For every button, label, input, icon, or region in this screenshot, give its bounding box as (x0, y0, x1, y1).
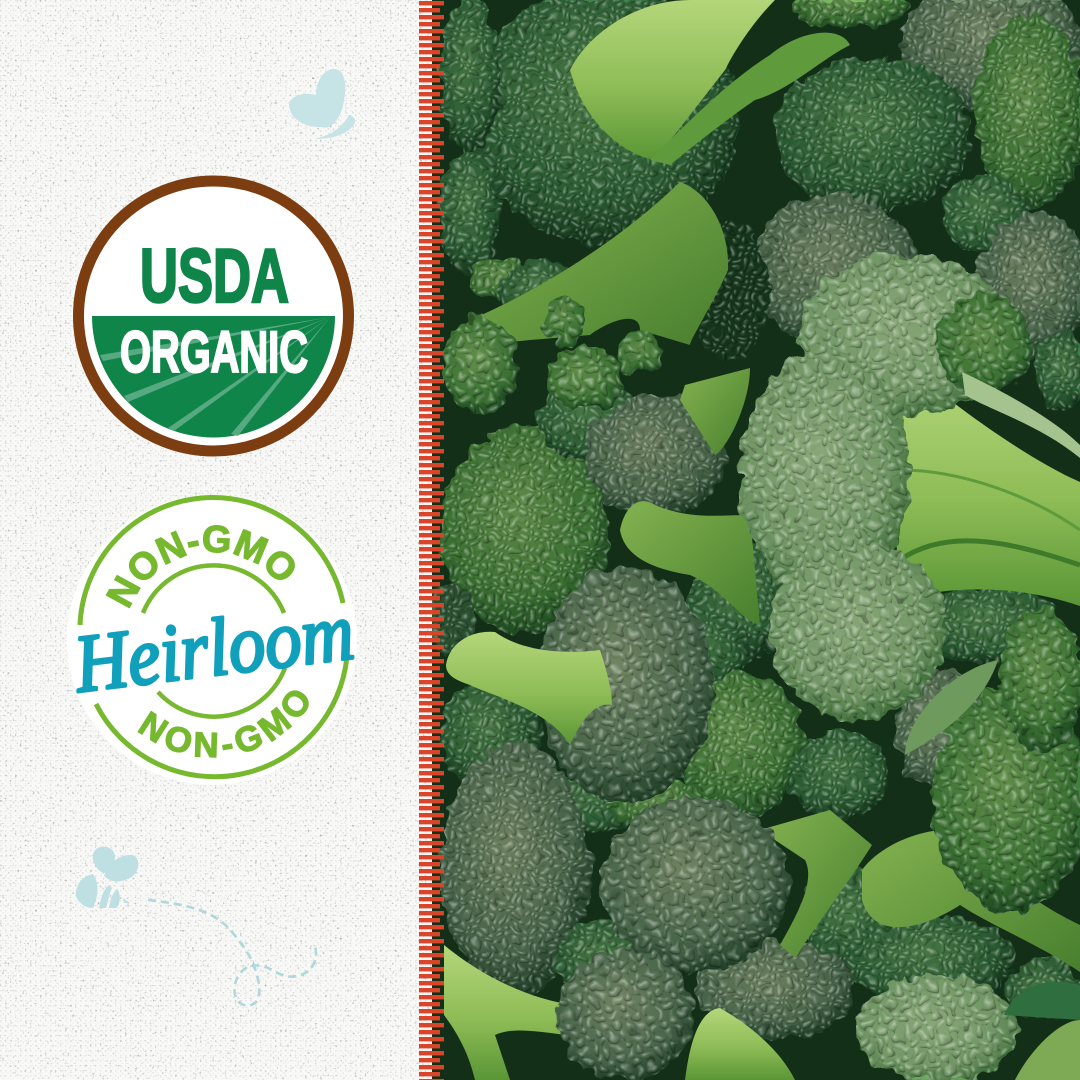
stem: main big floret stalks (890, 372, 1080, 606)
floret: right middle (932, 608, 1080, 912)
floret: gray lower center (601, 797, 789, 973)
floret: gray lower left (537, 567, 713, 803)
text: top NON-GMO: NON-GMO (106, 525, 295, 608)
panel: woven cloth background (0, 0, 432, 1080)
photo: broccoli florets (425, 0, 1080, 1080)
text: bottom NON-GMO: NON-GMO (138, 690, 309, 758)
stem: lower right center (760, 810, 872, 958)
stem: bottom right stalk (862, 830, 1080, 972)
stripe: red stitched border (419, 0, 444, 1080)
stem: bottom center stalk (685, 1008, 795, 1080)
icon: butterfly (289, 69, 355, 139)
text: ORGANIC: ORGANIC (120, 320, 308, 385)
leaf: lower right (905, 660, 998, 755)
stem: gray floret stalk (446, 632, 612, 745)
floret: upper-left cluster (442, 294, 662, 415)
leaf: bottom right dark (1004, 982, 1080, 1020)
text: USDA: USDA (140, 234, 289, 319)
outer ring arcs (80, 498, 347, 777)
badge: USDA Organic seal (78, 181, 348, 451)
stem: upper left stalk (470, 182, 728, 345)
floret: bottom left (557, 949, 693, 1080)
sun rays (100, 317, 330, 436)
text: Heirloom script: Heirloom (69, 585, 359, 710)
icon: bee with dashed flight trail (76, 847, 316, 1005)
leaf: pale right (962, 372, 1080, 458)
stem: bottom left stalk (444, 945, 575, 1080)
floret: big front center (740, 253, 1033, 720)
flight trail (148, 900, 316, 1005)
stem: bottom right corner (1015, 1020, 1080, 1080)
badge: Non-GMO Heirloom seal (67, 495, 359, 785)
stem: center-left curved stalk (620, 501, 760, 625)
floret: bottom right (858, 975, 1018, 1080)
bee (76, 847, 138, 908)
stem: top center stalk (570, 0, 775, 160)
green lower half (92, 316, 335, 438)
inner ring arcs (143, 565, 285, 717)
